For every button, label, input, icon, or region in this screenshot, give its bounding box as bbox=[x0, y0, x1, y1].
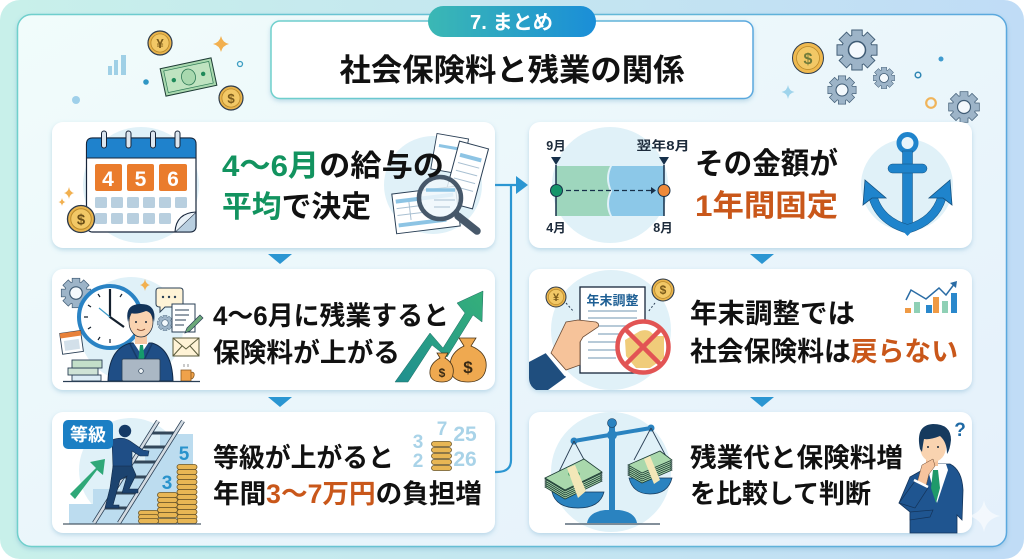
icon: banknote bbox=[160, 58, 217, 96]
badge: 等級 bbox=[63, 420, 113, 449]
panel: card 6 compare and decide bbox=[529, 412, 972, 533]
icon: thinking businessman: ? bbox=[954, 420, 966, 441]
text: card 6: を比較して判断 bbox=[690, 479, 871, 509]
connector arrow: left column to right column bbox=[495, 176, 528, 472]
icon: sparkle bbox=[782, 85, 794, 99]
icon: document with no-refund sign: 年末調整 bbox=[586, 293, 639, 308]
text: card 2: 保険料が上がる bbox=[213, 338, 400, 368]
icon: coin stack and numbers: 2 bbox=[413, 451, 423, 472]
arrow: card 2 to card 3 bbox=[268, 397, 292, 407]
panel: card 2 overtime bbox=[52, 269, 495, 390]
icon: small gear bbox=[874, 68, 894, 88]
icon: rising arrow with money bags bbox=[395, 291, 486, 382]
arrow: card 1 to card 2 bbox=[268, 254, 292, 264]
icon: coin stack and numbers: 3 bbox=[413, 432, 423, 453]
icon: sparkle bbox=[213, 36, 229, 52]
text: card 4 bbox=[695, 147, 838, 223]
arrow: card 5 to card 6 bbox=[750, 397, 774, 407]
icon: dollar coin bbox=[792, 42, 824, 74]
icon: right gear bbox=[949, 92, 979, 122]
icon: dots bbox=[72, 62, 242, 104]
title text: 社会保険料と残業の関係 bbox=[340, 53, 684, 88]
text: card 5: 年末調整では bbox=[690, 299, 855, 329]
icon: balance scale bbox=[545, 412, 672, 532]
text: card 1: 4〜6月の給与の bbox=[222, 150, 444, 183]
text: card 5: 社会保険料は戻らない bbox=[690, 337, 958, 367]
icon: document with no-refund sign bbox=[529, 270, 674, 390]
text: card 2: 4〜6月に残業すると bbox=[213, 301, 449, 331]
text: card 6 bbox=[690, 443, 903, 509]
icon: coin stack and numbers: 7 bbox=[437, 419, 447, 440]
icon: calendar: $ bbox=[77, 212, 86, 228]
icon: left money stack bbox=[545, 459, 602, 499]
icon: document with no-refund sign: $ bbox=[660, 283, 667, 297]
icon: dollar coin bbox=[219, 86, 243, 110]
icon: climbing a ladder: 5 bbox=[179, 444, 190, 465]
text: card 6: 残業代と保険料増 bbox=[690, 443, 903, 473]
icon: document with no-refund sign: ¥ bbox=[553, 292, 560, 304]
badge: 等級: 等級 bbox=[70, 424, 106, 445]
icon: rising arrow with money bags: $ bbox=[463, 358, 473, 377]
icon: rising arrow with money bags: $ bbox=[439, 366, 446, 380]
icon: large gear bbox=[837, 30, 877, 70]
icon: timeline 9月 to 翌年8月: 9月 bbox=[546, 139, 566, 153]
icon: coin stack and numbers bbox=[413, 419, 477, 472]
icon: timeline 9月 to 翌年8月: 翌年8月 bbox=[636, 138, 690, 153]
panel: card 1 average pay bbox=[52, 122, 495, 248]
icon: medium gear bbox=[828, 76, 856, 104]
text: card 1 bbox=[222, 150, 444, 224]
panel: card 4 fixed for one year bbox=[529, 122, 972, 248]
icon: growth chart bbox=[905, 281, 957, 313]
icon: climbing a ladder: 3 bbox=[162, 473, 172, 494]
decoration: top-left money icons bbox=[72, 31, 243, 110]
icon: rings and dots bbox=[915, 56, 944, 108]
icon: coin stack and numbers: 25 bbox=[453, 423, 477, 446]
icon: anchor bbox=[861, 134, 953, 236]
title pill bbox=[428, 6, 596, 37]
text: card 4: 1年間固定 bbox=[695, 190, 838, 223]
icon: timeline 9月 to 翌年8月: 4月 bbox=[546, 221, 566, 235]
icon: calendar: 6 bbox=[167, 168, 179, 191]
panel: card 3 grade increase bbox=[52, 412, 495, 533]
icon: documents with magnifier bbox=[384, 133, 489, 234]
icon: thinking businessman bbox=[899, 420, 966, 533]
title pill: 7. まとめ bbox=[470, 12, 553, 34]
title box bbox=[271, 6, 753, 98]
text: card 2 bbox=[213, 301, 449, 368]
icon: yen coin: ¥ bbox=[156, 36, 164, 51]
text: card 5 bbox=[690, 299, 958, 367]
icon: calendar: 5 bbox=[135, 168, 147, 191]
text: card 1: 平均で決定 bbox=[222, 191, 371, 224]
decoration: top-right gears and coin bbox=[782, 30, 979, 122]
text: card 3: 等級が上がると bbox=[213, 443, 394, 473]
icon: dollar coin: $ bbox=[804, 51, 813, 68]
arrow: card 4 to card 5 bbox=[750, 254, 774, 264]
icon: dollar coin: $ bbox=[227, 91, 235, 106]
icon: mini bar chart bbox=[108, 55, 126, 75]
panel: card 5 year-end adjustment bbox=[529, 269, 972, 390]
icon: yen coin bbox=[148, 31, 172, 55]
icon: right money stack bbox=[628, 451, 672, 484]
icon: coin stack and numbers: 26 bbox=[453, 448, 477, 471]
icon: timeline 9月 to 翌年8月: 8月 bbox=[653, 221, 673, 235]
icon: calendar bbox=[58, 127, 199, 243]
icon: office worker with clock bbox=[60, 277, 203, 382]
icon: climbing a ladder bbox=[63, 418, 201, 524]
watermark sparkle bbox=[968, 500, 1000, 532]
text: card 4: その金額が bbox=[695, 147, 838, 181]
icon: calendar: 4 bbox=[102, 168, 114, 191]
icon: timeline 9月 to 翌年8月 bbox=[546, 127, 690, 243]
text: card 3 bbox=[213, 443, 482, 509]
text: card 3: 年間3〜7万円の負担増 bbox=[213, 479, 482, 509]
